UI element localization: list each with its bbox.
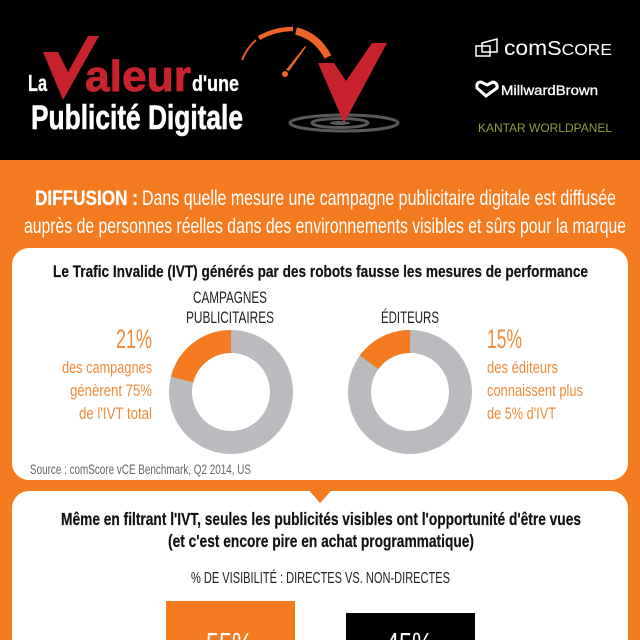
logo: Kantar Worldpanel: KANTAR WORLDPANEL <box>478 121 612 135</box>
label: campagnes publicitaires <box>186 288 274 327</box>
callout: 15%: de 5% d'IVT <box>487 404 556 423</box>
title: Publicité Digitale <box>31 99 243 137</box>
logo: comScore: comSCORE <box>504 37 612 60</box>
label: campagnes publicitaires: CAMPAGNES <box>193 288 267 307</box>
title: d'une <box>192 71 239 96</box>
callout: 15% <box>487 324 583 423</box>
callout: 21%: de l'IVT total <box>79 404 152 423</box>
bar: directes 55% <box>166 601 295 640</box>
panel: invalid traffic <box>12 248 628 480</box>
logo: MillwardBrown: MillwardBrown <box>501 82 598 98</box>
chart subtitle: % DE VISIBILITÉ : DIRECTES VS. NON-DIRECTES <box>191 568 450 587</box>
label: campagnes publicitaires: PUBLICITAIRES <box>186 308 274 327</box>
donut chart: campagnes 21% <box>180 342 282 442</box>
callout: 15%: des éditeurs <box>487 358 558 377</box>
label: éditeurs: ÉDITEURS <box>381 308 439 327</box>
heading: diffusion <box>24 187 626 238</box>
title: La <box>28 70 47 96</box>
callout: 21%: 21% <box>116 324 152 354</box>
panel: visibility <box>12 480 628 640</box>
callout: 21%: des campagnes <box>62 358 152 377</box>
arrow: connector <box>300 480 341 503</box>
bar: non-directes 45% <box>346 613 475 640</box>
heading: diffusion: DIFFUSION : <box>35 187 138 210</box>
callout: 21% <box>62 324 152 423</box>
icon: gauge and target <box>242 29 398 131</box>
source note: Source : comScore vCE Benchmark, Q2 2014, US <box>30 462 251 477</box>
callout: 15%: connaissent plus <box>487 381 583 400</box>
panel: header <box>0 0 640 160</box>
callout: 21%: génèrent 75% <box>70 381 152 400</box>
heading: visibility <box>61 509 581 551</box>
callout: 15%: 15% <box>487 324 522 354</box>
title <box>28 36 243 137</box>
panel: orange background <box>0 160 640 640</box>
donut chart: éditeurs 15% <box>360 341 460 442</box>
heading: visibility: (et c'est encore pire en achat programmatique) <box>168 531 474 551</box>
title: aleur <box>85 52 191 101</box>
